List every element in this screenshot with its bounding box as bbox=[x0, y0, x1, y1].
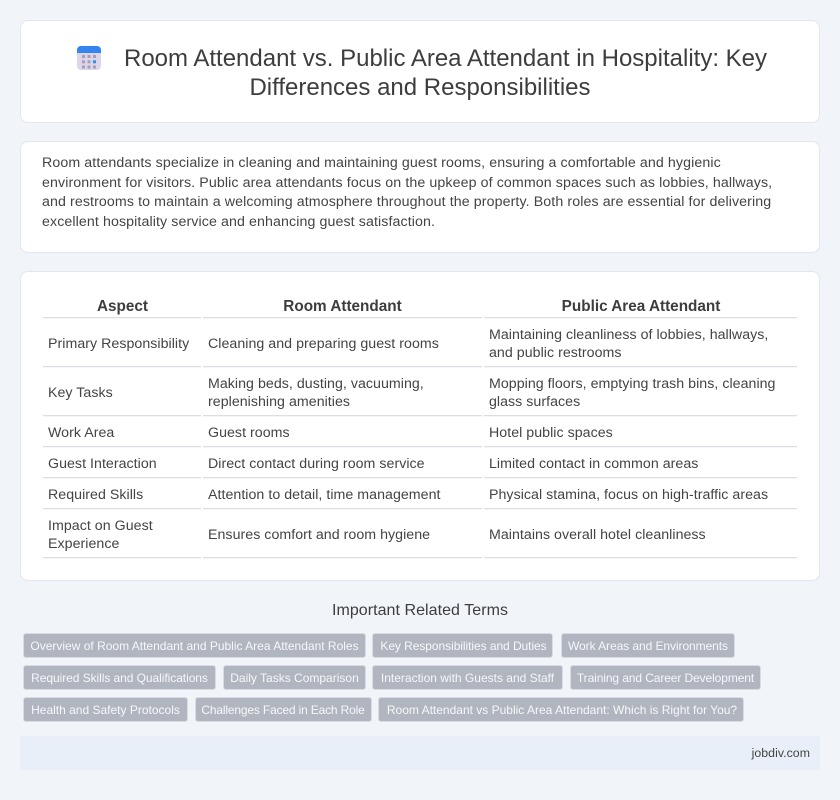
intro paragraph: excellent hospitality service and enhancing guest satisfaction. bbox=[42, 214, 435, 230]
row: primary responsibility: Primary Responsibility bbox=[48, 336, 189, 352]
table header bbox=[97, 298, 720, 315]
row: primary responsibility: Cleaning and preparing guest rooms bbox=[208, 336, 439, 352]
panel: comparison table bbox=[20, 271, 820, 581]
row: key tasks: replenishing amenities bbox=[208, 394, 350, 410]
row: guest interaction: Guest Interaction bbox=[48, 456, 157, 472]
row: impact on guest experience bbox=[48, 518, 706, 552]
row: work area bbox=[48, 425, 613, 441]
panel: title card bbox=[20, 20, 820, 123]
tag list: related terms: Required Skills and Qualifications bbox=[31, 671, 208, 685]
table header: Room Attendant bbox=[283, 298, 402, 315]
tag list: related terms: Room Attendant vs Public Area Attendant: Which is Right for You? bbox=[387, 703, 737, 717]
tag list: related terms: Key Responsibilities and Duties bbox=[380, 639, 547, 653]
row: required skills: Required Skills bbox=[48, 487, 143, 503]
row: key tasks bbox=[48, 376, 776, 410]
row: primary responsibility: Maintaining cleanliness of lobbies, hallways, bbox=[489, 327, 768, 343]
tag list: related terms: Daily Tasks Comparison bbox=[230, 671, 359, 685]
intro paragraph: environment for visitors. Public area attendants focus on the upkeep of common spaces such as lobbies, hallways, bbox=[42, 174, 772, 190]
row: key tasks: Making beds, dusting, vacuuming, bbox=[208, 376, 424, 392]
row: work area: Guest rooms bbox=[208, 425, 290, 441]
intro paragraph: and restrooms to maintain a welcoming atmosphere throughout the property. Both roles are essential for delivering bbox=[42, 194, 771, 210]
tag list: related terms: Health and Safety Protocols bbox=[31, 703, 180, 717]
panel: intro text bbox=[20, 141, 820, 253]
row: key tasks: Key Tasks bbox=[48, 385, 113, 401]
row: work area: Hotel public spaces bbox=[489, 425, 613, 441]
row: primary responsibility bbox=[48, 327, 768, 361]
row: impact on guest experience: Impact on Guest bbox=[48, 518, 153, 534]
footer source label: jobdiv.com bbox=[752, 746, 810, 760]
table header: Public Area Attendant bbox=[562, 298, 720, 315]
icon: calendar bbox=[77, 46, 101, 70]
table header: Aspect bbox=[97, 298, 148, 315]
row: required skills bbox=[48, 487, 768, 503]
row: primary responsibility: and public restrooms bbox=[489, 345, 622, 361]
title: Differences and Responsibilities bbox=[249, 74, 591, 101]
intro paragraph: Room attendants specialize in cleaning and maintaining guest rooms, ensuring a comfortable and hygienic bbox=[42, 155, 721, 171]
row: required skills: Physical stamina, focus on high-traffic areas bbox=[489, 487, 768, 503]
tag list: related terms: Training and Career Development bbox=[577, 671, 754, 685]
tag list: related terms bbox=[23, 633, 761, 722]
row: key tasks: Mopping floors, emptying trash bins, cleaning bbox=[489, 376, 776, 392]
row: impact on guest experience: Maintains overall hotel cleanliness bbox=[489, 527, 706, 543]
footer bar bbox=[20, 736, 820, 770]
tag list: related terms: Challenges Faced in Each Role bbox=[201, 703, 365, 717]
tag list: related terms: Interaction with Guests and Staff bbox=[381, 671, 554, 685]
row: impact on guest experience: Ensures comfort and room hygiene bbox=[208, 527, 430, 543]
intro paragraph bbox=[42, 155, 772, 230]
row: work area: Work Area bbox=[48, 425, 114, 441]
heading: important related terms: Important Related Terms bbox=[332, 602, 508, 619]
row: guest interaction: Direct contact during room service bbox=[208, 456, 425, 472]
row: guest interaction bbox=[48, 456, 698, 472]
tag list: related terms: Work Areas and Environments bbox=[568, 639, 728, 653]
row: key tasks: glass surfaces bbox=[489, 394, 580, 410]
title: Room Attendant vs. Public Area Attendant in Hospitality: Key bbox=[124, 45, 767, 72]
row: impact on guest experience: Experience bbox=[48, 536, 119, 552]
row: guest interaction: Limited contact in common areas bbox=[489, 456, 698, 472]
row: required skills: Attention to detail, time management bbox=[208, 487, 441, 503]
tag list: related terms: Overview of Room Attendant and Public Area Attendant Roles bbox=[30, 639, 359, 653]
title bbox=[124, 45, 767, 101]
